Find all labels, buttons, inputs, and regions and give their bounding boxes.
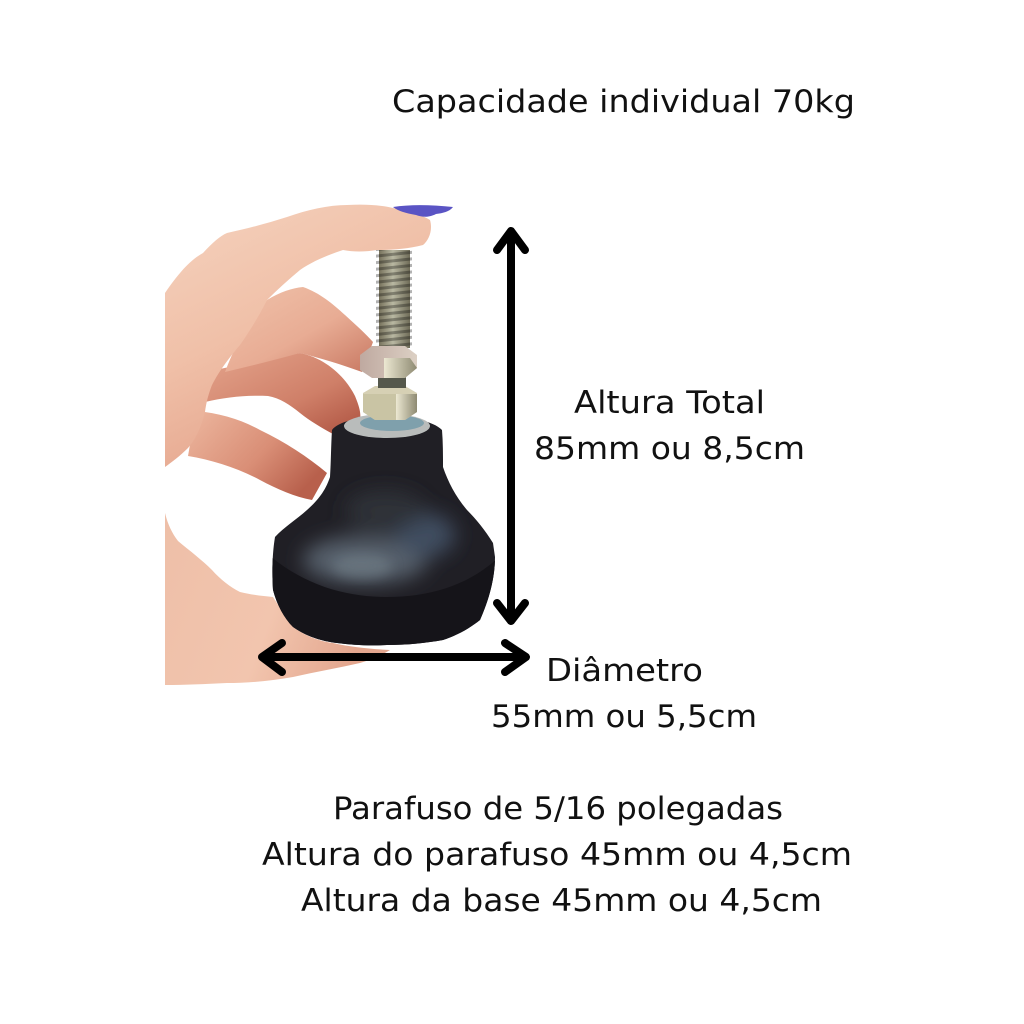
base highlight (303, 490, 455, 584)
label: diameter: 55mm ou 5,5cm (491, 699, 757, 735)
photo: hand holding leveling foot (165, 205, 505, 685)
label: diameter (491, 653, 757, 735)
hand: pinky finger (188, 411, 327, 500)
infographic canvas (165, 88, 852, 914)
hand: palm and index finger (165, 205, 431, 467)
bolt thread (376, 250, 412, 348)
hand: middle finger (225, 287, 373, 372)
base lower band (270, 556, 500, 650)
bolt between nuts (378, 376, 406, 388)
text block: screw specifications: Altura do parafuso 45mm ou 4,5cm (262, 837, 852, 873)
text block: screw specifications: Altura da base 45mm ou 4,5cm (301, 883, 822, 919)
text block: screw specifications (262, 791, 852, 919)
metal washer (344, 414, 430, 438)
upper hex nut (360, 346, 417, 378)
label: total height: Altura Total (574, 385, 765, 421)
arrow: diameter (262, 643, 526, 672)
icon: painted fingernail (393, 205, 453, 217)
rubber base (272, 420, 495, 646)
arrow: total height (497, 231, 525, 621)
hand: ring finger (205, 353, 360, 434)
label: total height (534, 385, 805, 467)
label: diameter: Diâmetro (546, 653, 703, 689)
title: individual capacity: Capacidade individual 70kg (392, 84, 855, 120)
lower hex nut (363, 386, 417, 420)
text block: screw specifications: Parafuso de 5/16 polegadas (333, 791, 783, 827)
label: total height: 85mm ou 8,5cm (534, 431, 805, 467)
hand: thumb (165, 513, 390, 685)
